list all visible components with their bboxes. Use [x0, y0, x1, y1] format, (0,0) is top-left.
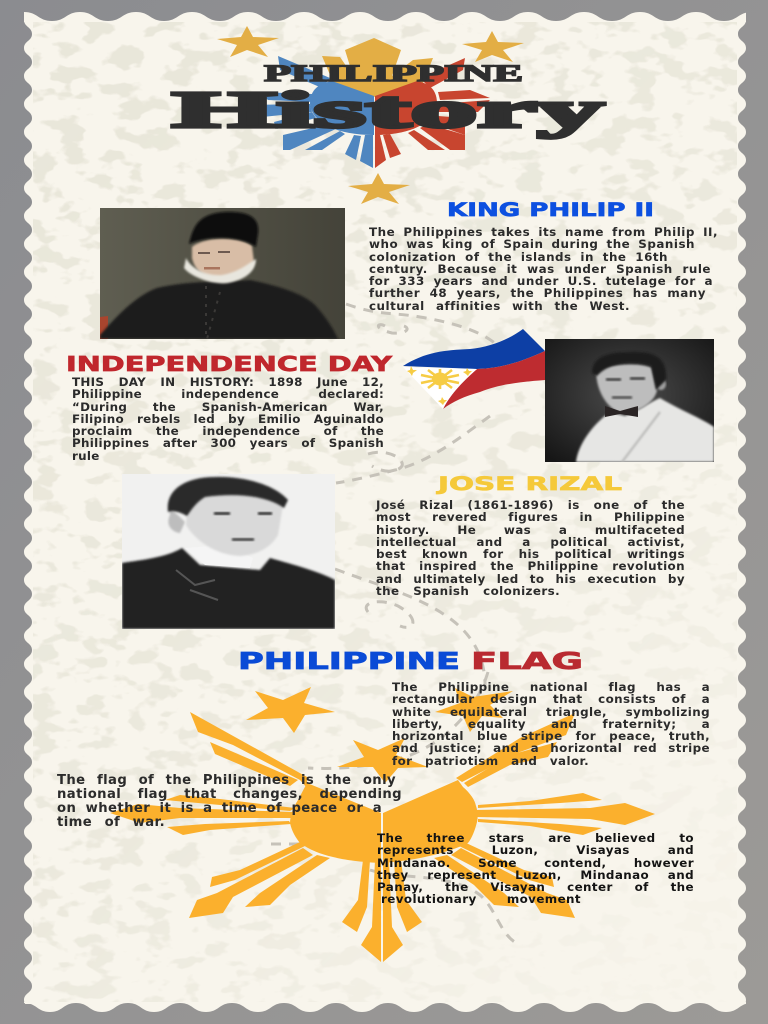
- rays: top right: [456, 713, 575, 782]
- rays: right: [476, 803, 655, 825]
- sun emblem: blue half: [245, 56, 374, 168]
- title: [172, 61, 604, 139]
- text block: three stars: Panay, the Visayan center of the: [377, 880, 694, 894]
- text block: Independence Day: rule: [72, 448, 100, 462]
- heading: Independence Day: INDEPENDENCE DAY: [66, 352, 393, 376]
- rays: bottom: [361, 860, 381, 962]
- text block: three stars: Mindanao. Some contend, however: [377, 856, 694, 870]
- sun emblem: red half: [375, 58, 490, 168]
- text block: Jose Rizal: intellectual and a political activist,: [376, 535, 685, 549]
- heading: Jose Rizal: JOSE RIZAL: [435, 473, 622, 495]
- photo: King Philip II: [100, 208, 345, 339]
- text block: flag design: The Philippine national flag has a: [392, 680, 710, 694]
- heading: King Philip II: KING PHILIP II: [447, 200, 654, 221]
- text block: Jose Rizal: most revered figures in Philippine: [376, 510, 685, 524]
- text block: Independence Day: Philippine independence declared:: [72, 387, 384, 401]
- text block: three stars: they represent Luzon, Mindanao and: [377, 868, 694, 882]
- icon: gold star left: [217, 26, 279, 57]
- star: right: [435, 688, 513, 732]
- sun disc: [290, 783, 381, 863]
- text block: King Philip II: cultural affinities with the West.: [369, 298, 630, 312]
- text block: Independence Day: “During the Spanish-American War,: [72, 400, 384, 414]
- text block: Jose Rizal: [375, 498, 685, 598]
- star: top left: [246, 687, 335, 733]
- icon: Philippine waving flag: [403, 329, 545, 409]
- text block: three stars: The three stars are believed to: [377, 831, 694, 845]
- text block: King Philip II: for 333 years and under U.S. tutelage for a: [369, 274, 713, 288]
- text block: flag design: liberty, equality and fraternity; a: [392, 717, 710, 731]
- title: History: [172, 82, 604, 139]
- text block: flag design: rectangular design that consists of a: [392, 692, 710, 706]
- icon: gold star right: [462, 31, 524, 62]
- text block: Jose Rizal: the Spanish colonizers.: [376, 584, 560, 598]
- heading: Philippine Flag: PHILIPPINE: [238, 649, 460, 675]
- text block: three stars: represents Luzon, Visayas and: [377, 843, 694, 857]
- text block: flag changes in war: The flag of the Philippines is the only: [57, 773, 396, 788]
- icon: large golden sun with stars: [110, 687, 655, 962]
- text block: flag design: and justice; and a horizontal red stripe: [392, 741, 710, 755]
- text block: King Philip II: century. Because it was under Spanish rule: [369, 262, 711, 276]
- icon: gold star bottom: [348, 173, 410, 204]
- text block: three stars: [377, 831, 694, 906]
- text block: Independence Day: Filipino rebels led by Emilio Aguinaldo: [72, 412, 384, 426]
- text block: Jose Rizal: history. He was a multifaceted: [376, 522, 685, 536]
- text block: Independence Day: THIS DAY IN HISTORY: 1898 June 12,: [72, 375, 384, 389]
- flag: blue stripe: [403, 329, 545, 369]
- text block: flag changes in war: [57, 773, 402, 830]
- text block: Jose Rizal: José Rizal (1861-1896) is one of the: [376, 498, 685, 512]
- rays: bottom right: [434, 842, 575, 918]
- text block: Jose Rizal: best known for his political writings: [376, 547, 685, 561]
- heading: Philippine Flag: [238, 649, 583, 675]
- flag: red stripe: [443, 351, 545, 409]
- text block: flag changes in war: on whether it is a time of peace or a: [57, 801, 382, 816]
- text block: flag design: [392, 680, 710, 768]
- text block: Independence Day: Philippines after 300 years of Spanish: [72, 436, 384, 450]
- text block: King Philip II: The Philippines takes its name from Philip II,: [369, 225, 718, 239]
- text block: Independence Day: proclaim the independence of the: [72, 424, 384, 438]
- dashed route line: [271, 304, 518, 944]
- text block: King Philip II: colonization of the islands in the 16th: [369, 250, 668, 264]
- rays: top left: [190, 712, 307, 788]
- flag: sun: [421, 369, 459, 389]
- text block: flag design: for patriotism and valor.: [392, 754, 589, 768]
- rays: bottom left: [189, 842, 330, 918]
- text block: flag design: white equilateral triangle, symbolizing: [392, 704, 710, 718]
- text block: flag changes in war: time of war.: [57, 815, 165, 830]
- text block: flag design: horizontal blue stripe for peace, truth,: [392, 729, 710, 743]
- rays: left: [110, 804, 292, 823]
- photo: Emilio Aguinaldo: [545, 339, 714, 462]
- text block: King Philip II: [369, 225, 718, 312]
- flag: white triangle: [403, 367, 477, 409]
- text block: three stars: revolutionary movement: [381, 892, 581, 906]
- title: PHILIPPINE: [264, 61, 523, 86]
- text block: King Philip II: who was king of Spain during the Spanish: [369, 237, 695, 251]
- sun emblem: gold top: [322, 38, 433, 97]
- text block: Jose Rizal: that inspired the Philippine revolution: [376, 559, 685, 573]
- star: centre: [337, 738, 428, 783]
- heading: Philippine Flag: FLAG: [471, 649, 583, 675]
- icon: sun emblem behind title: [245, 38, 490, 168]
- text block: Independence Day: [72, 375, 384, 462]
- text block: flag changes in war: national flag that changes, depending: [57, 787, 402, 802]
- photo: Jose Rizal: [122, 474, 335, 629]
- text block: Jose Rizal: and ultimately led to his execution by: [376, 572, 685, 586]
- text block: King Philip II: further 48 years, the Philippines has many: [369, 286, 706, 300]
